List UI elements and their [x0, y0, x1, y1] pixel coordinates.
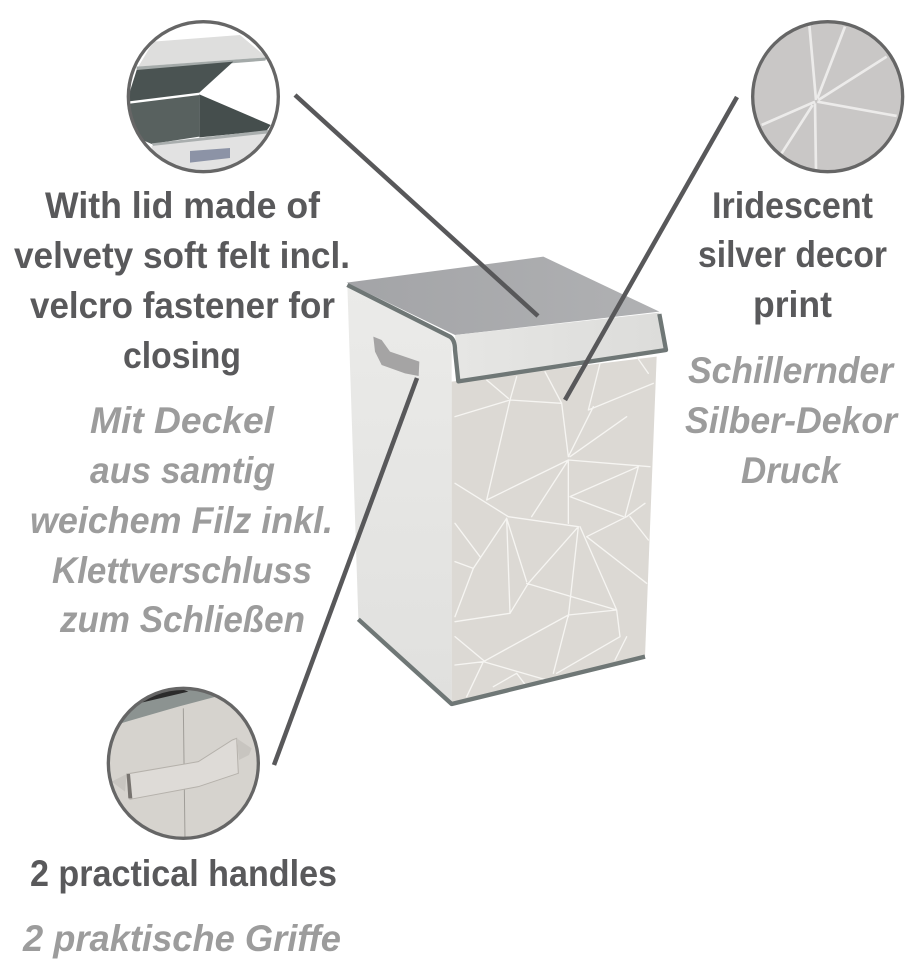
leader line: handles	[274, 378, 417, 765]
silver decor print	[455, 357, 653, 697]
detail circle: silver decor	[750, 20, 907, 177]
side handle	[373, 337, 419, 376]
heading: decor feature (English): print	[753, 284, 832, 325]
heading: lid feature (English): velcro fastener for	[30, 285, 335, 326]
text block: lid feature (German): aus samtig	[90, 450, 275, 491]
heading: lid feature (English): velvety soft felt incl.	[14, 235, 350, 276]
heading: lid feature (English): With lid made of	[45, 185, 321, 226]
text block: decor feature (German): Druck	[741, 450, 842, 491]
text block: decor feature (German): Silber-Dekor	[685, 400, 900, 441]
lid and flap trim	[347, 285, 666, 381]
text block: lid feature (German): weichem Filz inkl.	[30, 500, 333, 541]
lid front flap	[455, 313, 666, 380]
text block: handles feature (German): 2 praktische Griffe	[22, 918, 341, 959]
heading: handles feature (English): 2 practical handles	[30, 853, 337, 894]
leader line: decor print	[565, 97, 737, 400]
text block: lid feature (German): Klettverschluss	[52, 550, 312, 591]
detail circle: lid interior	[126, 20, 280, 174]
text block: lid feature (German): zum Schließen	[59, 599, 305, 640]
heading: decor feature (English): Iridescent	[712, 185, 873, 226]
box front panel	[452, 357, 657, 705]
heading: decor feature (English)	[698, 185, 887, 325]
text block: decor feature (German)	[685, 350, 900, 491]
leader line: lid	[295, 95, 538, 316]
lid top	[347, 257, 659, 335]
box left side	[347, 285, 452, 705]
text block: decor feature (German): Schillernder	[688, 350, 895, 391]
product: laundry box	[347, 257, 666, 705]
heading: lid feature (English)	[14, 185, 350, 376]
detail circle: handle	[105, 683, 265, 843]
text block: lid feature (German)	[30, 400, 333, 640]
heading: decor feature (English): silver decor	[698, 234, 887, 275]
heading: lid feature (English): closing	[123, 335, 241, 376]
text block: lid feature (German): Mit Deckel	[90, 400, 275, 441]
bottom edge trim	[358, 619, 645, 704]
